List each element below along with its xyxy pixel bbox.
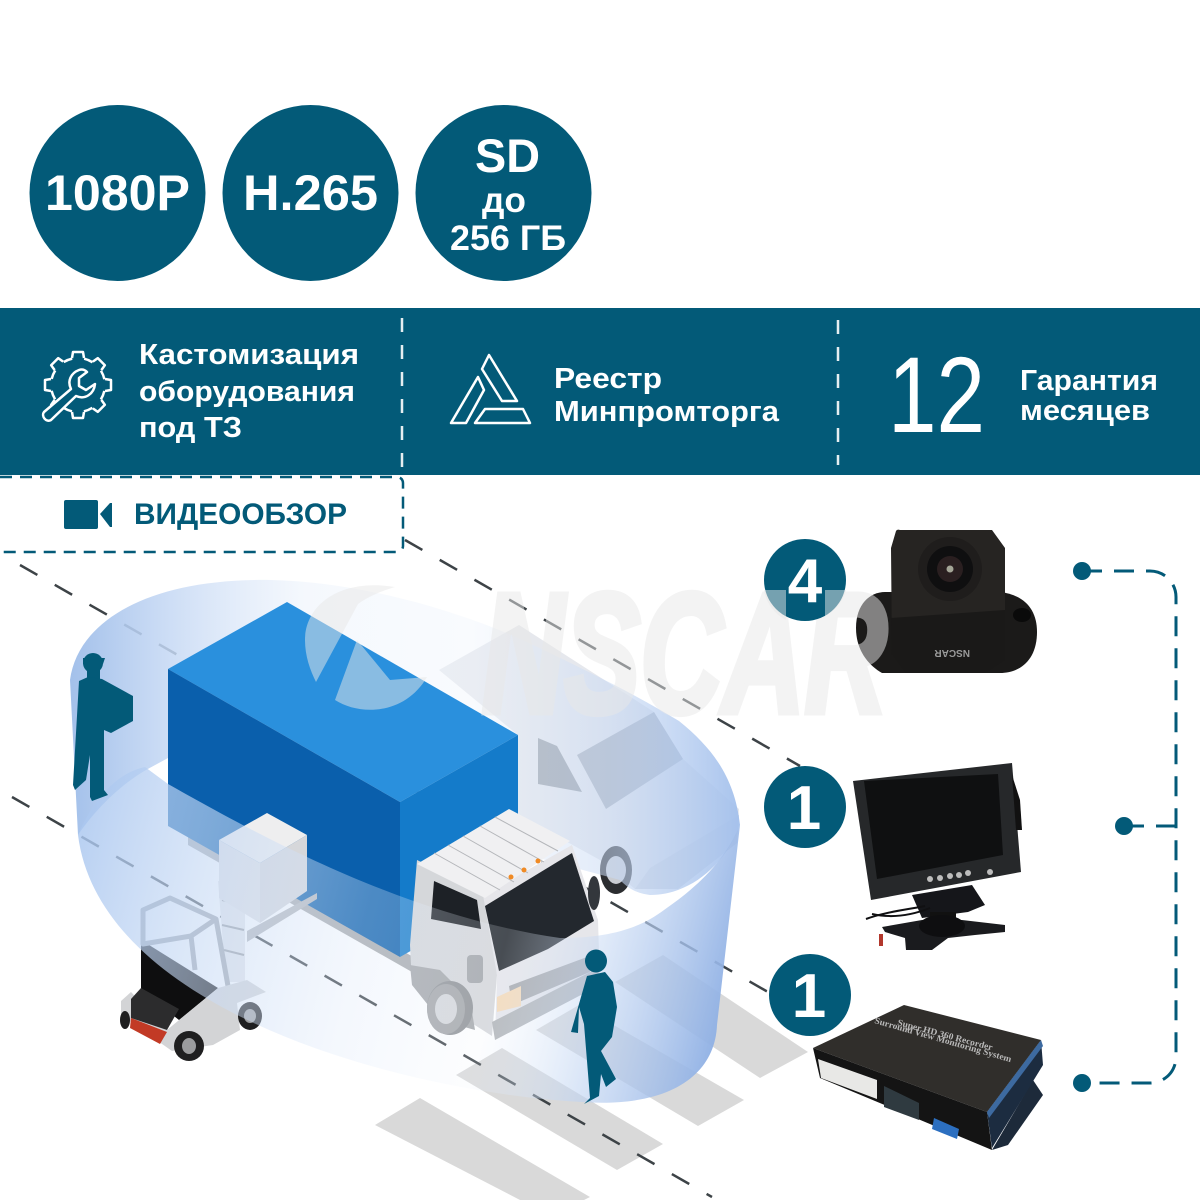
quantity badge: 1 recorder <box>767 952 853 1038</box>
quantity badge: 4 cameras: 4 <box>788 547 823 616</box>
white van behind truck <box>439 625 739 894</box>
walking pedestrian <box>571 950 617 1104</box>
icon: video camera <box>64 500 112 529</box>
text: warranty months: месяцев <box>1020 395 1150 427</box>
kit bracket connector <box>1073 562 1176 1092</box>
forklift with load <box>120 813 317 1061</box>
icon: gear with wrench <box>43 352 111 421</box>
text: registry <box>554 363 780 428</box>
recorder label: Super HD 360 Recorder <box>896 1017 994 1052</box>
badge: SD up to 256 GB: SD <box>475 129 540 182</box>
blue field of view back wall <box>70 580 740 895</box>
quantity badge: 1 monitor: 1 <box>787 774 821 843</box>
spec badges <box>30 105 592 281</box>
product: video recorder <box>813 1005 1043 1150</box>
person carrying box <box>73 653 133 801</box>
text: customization: под ТЗ <box>139 412 242 444</box>
text: registry: Минпромторга <box>554 396 780 428</box>
text: warranty months <box>1020 365 1158 427</box>
text: registry: Реестр <box>554 363 662 395</box>
badge: H.265 <box>222 105 398 281</box>
illustration: truck surround view scene <box>12 540 808 1200</box>
badge: H.265: H.265 <box>243 165 378 221</box>
badge: SD up to 256 GB: 256 ГБ <box>450 219 566 258</box>
camera brand mark: NSCAR <box>934 647 970 658</box>
badge: SD up to 256 GB: до <box>482 181 526 220</box>
video review button <box>0 477 403 552</box>
recorder label: Surround View Monitoring System <box>873 1015 1013 1064</box>
text: warranty months: Гарантия <box>1020 365 1158 397</box>
truck cab <box>410 809 600 1040</box>
badge: SD up to 256 GB <box>416 105 592 281</box>
product: camera <box>856 530 1037 673</box>
text: customization <box>139 339 359 444</box>
blue field of view front wall <box>78 767 740 1103</box>
text: customization: Кастомизация <box>139 339 359 371</box>
road lane markings <box>12 540 800 1197</box>
zebra crossing <box>375 955 808 1200</box>
truck chassis <box>188 828 415 972</box>
watermark: NSCAR: NSCAR <box>482 559 887 749</box>
watermark: NSCAR <box>305 559 887 749</box>
icon: registry triangle <box>451 355 530 423</box>
feature band <box>0 308 1200 475</box>
text: customization: оборудования <box>139 376 355 408</box>
text: 12: 12 <box>888 334 985 455</box>
truck cargo box <box>168 602 518 957</box>
badge: 1080P <box>30 105 206 281</box>
quantity badge: 1 monitor <box>764 766 846 848</box>
quantity badge: 4 cameras <box>764 539 846 621</box>
text: video review: ВИДЕООБЗОР <box>134 498 347 531</box>
quantity badge: 1 recorder: 1 <box>792 962 826 1031</box>
product: monitor <box>853 763 1022 950</box>
badge: 1080P: 1080P <box>45 165 190 221</box>
